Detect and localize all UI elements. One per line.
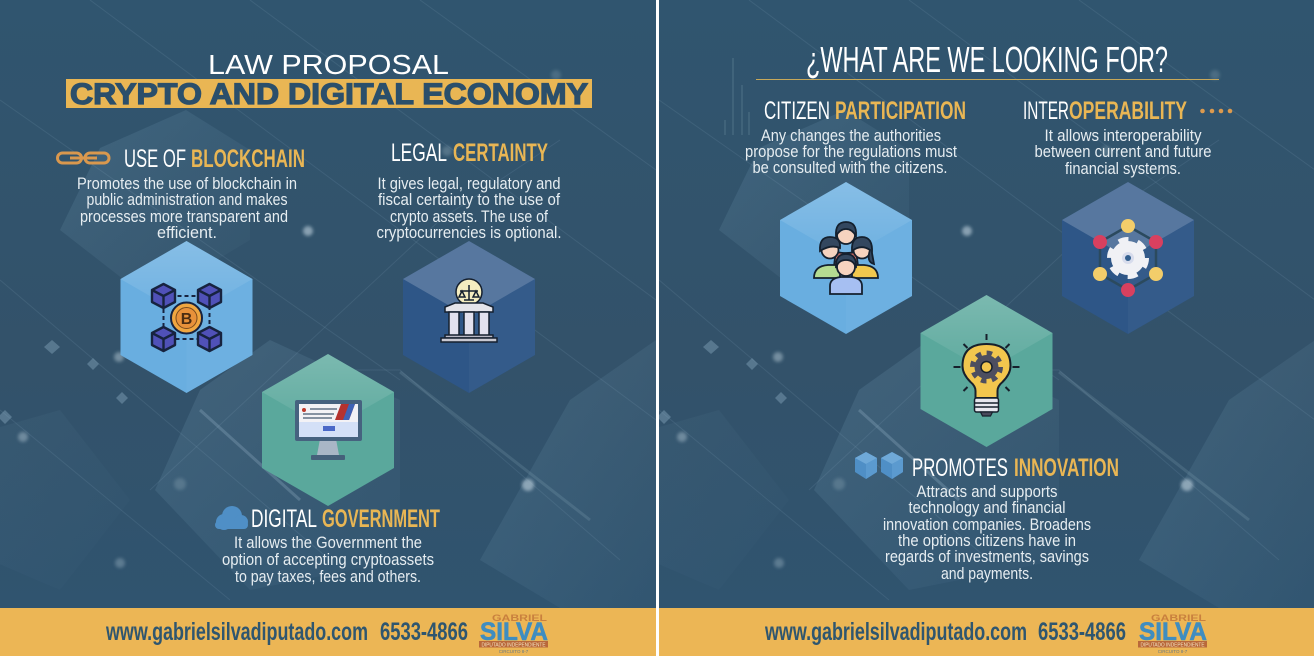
logo: gabriel silva: GABRIEL <box>492 613 548 623</box>
text: interoperability description: between current and future <box>1034 143 1212 161</box>
text: legal certainty description <box>376 175 562 242</box>
text: innovation description: and payments. <box>941 565 1033 583</box>
heading: legal certainty <box>391 139 548 167</box>
logo: gabriel silva: CIRCUITO 8-7 <box>1158 649 1188 654</box>
footer bar: right contact <box>659 608 1314 656</box>
text: citizen participation description: Any changes the authorities <box>761 127 941 145</box>
icon: cloud <box>215 506 248 530</box>
text: citizen participation description: be consulted with the citizens. <box>752 159 948 177</box>
icon: computer monitor <box>295 400 362 460</box>
hexagon: interoperability <box>1062 182 1194 334</box>
hexagon: blockchain <box>120 241 252 393</box>
text: digital government description: to pay taxes, fees and others. <box>235 568 421 586</box>
logo: gabriel silva: CIRCUITO 8-7 <box>499 649 529 654</box>
text: phone: 6533-4866 <box>380 618 468 646</box>
panel: right, what are we looking for <box>649 0 1314 656</box>
heading: promotes innovation: PROMOTES <box>912 454 1008 482</box>
text: citizen participation description: propose for the regulations must <box>745 143 957 161</box>
heading: interoperability <box>1023 97 1187 125</box>
heading: citizen participation: CITIZEN <box>764 97 830 125</box>
panel: left, law proposal <box>0 0 656 656</box>
heading: citizen participation <box>764 97 966 125</box>
text: innovation description: the options citizens have in <box>898 532 1076 550</box>
text: interoperability description: financial systems. <box>1065 160 1181 178</box>
icon: group of people <box>814 222 878 294</box>
heading: promotes innovation: INNOVATION <box>1014 454 1119 482</box>
text: interoperability description: It allows interoperability <box>1044 127 1202 145</box>
heading: use of blockchain: BLOCKCHAIN <box>191 145 305 173</box>
heading: interoperability: INTER <box>1023 97 1069 125</box>
heading: use of blockchain <box>124 145 305 173</box>
icon: four dots <box>1200 109 1232 113</box>
text: innovation description: regards of investments, savings <box>885 548 1089 566</box>
icon: blockchain network with bitcoin <box>152 284 221 351</box>
heading banner: crypto and digital economy: CRYPTO AND DIGITAL ECONOMY <box>70 78 588 111</box>
heading: use of blockchain: USE OF <box>124 145 186 173</box>
text: legal certainty description: crypto assets. The use of <box>390 208 548 226</box>
text: innovation description: technology and financial <box>908 499 1066 517</box>
icon: light bulb with gear <box>954 334 1020 416</box>
heading: legal certainty: CERTAINTY <box>453 139 548 167</box>
icon: chain link <box>58 153 109 163</box>
text: citizen participation description <box>745 127 957 177</box>
logo: gabriel silva: DIPUTADO INDEPENDIENTE <box>1140 642 1205 648</box>
hexagon: legal certainty <box>403 241 535 393</box>
text: interoperability description <box>1034 127 1212 178</box>
text: legal certainty description: It gives legal, regulatory and <box>378 175 560 193</box>
heading: citizen participation: PARTICIPATION <box>835 97 966 125</box>
text: digital government description: It allows the Government the <box>234 534 422 552</box>
text: innovation description: innovation companies. Broadens <box>883 516 1091 534</box>
logo: gabriel silva: SILVA <box>480 618 548 646</box>
hexagon: digital government <box>262 354 394 506</box>
title: law proposal: LAW PROPOSAL <box>208 49 449 80</box>
text: innovation description <box>883 483 1091 583</box>
heading: promotes innovation <box>912 454 1119 482</box>
logo: gabriel silva: DIPUTADO INDEPENDIENTE <box>482 642 546 648</box>
footer bar: left contact <box>0 608 656 656</box>
text: website: www.gabrielsilvadiputado.com <box>105 618 368 646</box>
text: blockchain description <box>77 175 297 242</box>
text: website: www.gabrielsilvadiputado.com <box>764 618 1027 646</box>
text: legal certainty description: cryptocurrencies is optional. <box>376 224 562 242</box>
text: blockchain description: efficient. <box>157 224 217 242</box>
icon: blockchain network with bitcoin: B <box>181 311 192 328</box>
icon: two cubes <box>855 452 903 479</box>
logo: gabriel silva <box>1138 613 1207 654</box>
text: blockchain description: public administration and makes <box>86 191 288 209</box>
text: blockchain description: Promotes the use of blockchain in <box>77 175 297 193</box>
text: innovation description: Attracts and supports <box>916 483 1058 501</box>
hexagon: citizen participation <box>780 182 912 334</box>
heading: digital government: DIGITAL <box>251 505 317 533</box>
hexagon: promotes innovation <box>920 295 1052 447</box>
divider: gold rule <box>756 79 1219 80</box>
heading: digital government <box>251 505 440 533</box>
logo: gabriel silva <box>479 613 548 654</box>
heading: interoperability: OPERABILITY <box>1069 97 1187 125</box>
text: phone: 6533-4866 <box>1038 618 1126 646</box>
heading: digital government: GOVERNMENT <box>322 505 440 533</box>
icon: courthouse with scales <box>441 279 497 342</box>
heading: legal certainty: LEGAL <box>391 139 447 167</box>
text: legal certainty description: fiscal certainty to the use of <box>378 191 560 209</box>
icon: gear with connected nodes <box>1093 219 1163 297</box>
text: blockchain description: processes more transparent and <box>80 208 288 226</box>
logo: gabriel silva: GABRIEL <box>1151 613 1207 623</box>
logo: gabriel silva: SILVA <box>1139 618 1207 646</box>
text: digital government description: option of accepting cryptoassets <box>222 551 434 569</box>
text: digital government description <box>222 534 434 586</box>
